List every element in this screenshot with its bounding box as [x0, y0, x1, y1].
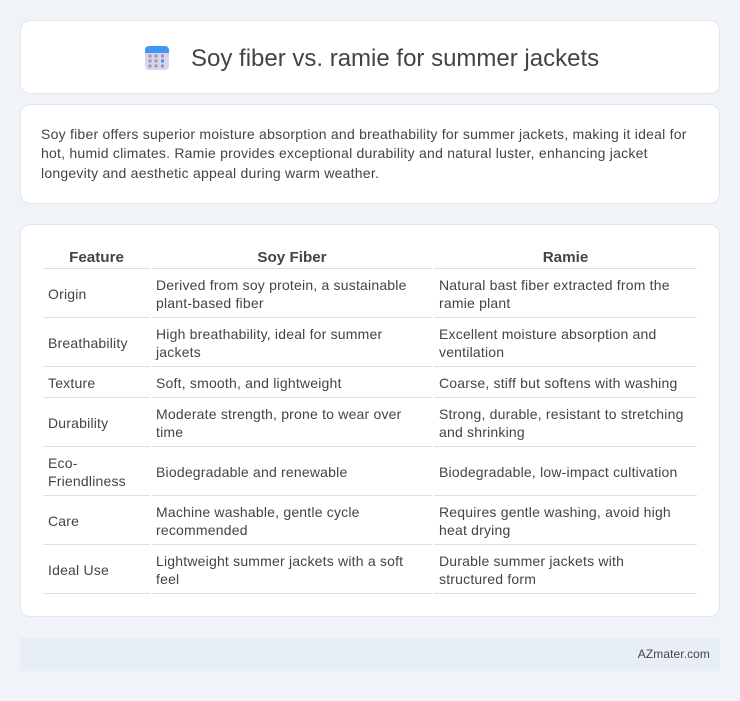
panel: comparison table: time [156, 424, 183, 440]
panel: comparison table: Coarse, stiff but softens with washing [439, 375, 677, 391]
summary text: hot, humid climates. Ramie provides exceptional durability and natural luster, enhancing jacket [41, 145, 648, 161]
panel: comparison table: Natural bast fiber extracted from the [439, 277, 670, 293]
row: Eco-Friendliness: Eco- [48, 455, 78, 471]
footer bar [20, 638, 720, 671]
panel: comparison table: Derived from soy protein, a sustainable [156, 277, 407, 293]
header: Ramie: Ramie [543, 249, 588, 266]
panel: comparison table: structured form [439, 571, 536, 587]
summary text: longevity and aesthetic appeal during warm weather. [41, 164, 379, 180]
header: Feature: Feature [69, 249, 124, 266]
summary text: Soy fiber offers superior moisture absorption and breathability for summer jackets, making it ideal for [41, 126, 687, 142]
panel: comparison table: plant-based fiber [156, 295, 264, 311]
row: Eco-Friendliness: Friendliness [48, 473, 126, 489]
row: Durability: Durability [48, 415, 108, 431]
title panel [20, 20, 720, 94]
row: Breathability: Breathability [48, 335, 128, 351]
summary text [41, 126, 687, 181]
panel: comparison table: feel [156, 571, 179, 587]
panel: comparison table: Durable summer jackets with [439, 553, 624, 569]
panel: comparison table: Soft, smooth, and lightweight [156, 375, 342, 391]
panel: comparison table: ventilation [439, 344, 504, 360]
row: Texture: Texture [48, 375, 95, 391]
panel: comparison table [20, 224, 720, 617]
panel: comparison table: Biodegradable, low-impact cultivation [439, 464, 678, 480]
icon: calendar [145, 46, 169, 70]
header: Soy Fiber: Soy Fiber [257, 249, 327, 266]
panel: comparison table: High breathability, ideal for summer [156, 326, 382, 342]
footer text: AZmater.com [638, 647, 710, 661]
row: Eco-Friendliness [48, 455, 126, 489]
panel: comparison table: Biodegradable and renewable [156, 464, 347, 480]
row: Care: Care [48, 513, 79, 529]
panel: comparison table: Excellent moisture absorption and [439, 326, 656, 342]
panel: comparison table: heat drying [439, 522, 510, 538]
row: Origin: Origin [48, 286, 87, 302]
panel: comparison table: Moderate strength, prone to wear over [156, 406, 402, 422]
panel: comparison table: jackets [156, 344, 201, 360]
panel: comparison table: and shrinking [439, 424, 525, 440]
panel: comparison table: ramie plant [439, 295, 510, 311]
panel: comparison table: Requires gentle washing, avoid high [439, 504, 671, 520]
panel: comparison table: Lightweight summer jackets with a soft [156, 553, 403, 569]
panel: comparison table: Machine washable, gentle cycle [156, 504, 360, 520]
title: Soy fiber vs. ramie for summer jackets [191, 45, 599, 72]
panel: comparison table: recommended [156, 522, 248, 538]
panel: summary [20, 104, 720, 204]
row: Ideal Use: Ideal Use [48, 562, 109, 578]
panel: comparison table: Strong, durable, resistant to stretching [439, 406, 684, 422]
